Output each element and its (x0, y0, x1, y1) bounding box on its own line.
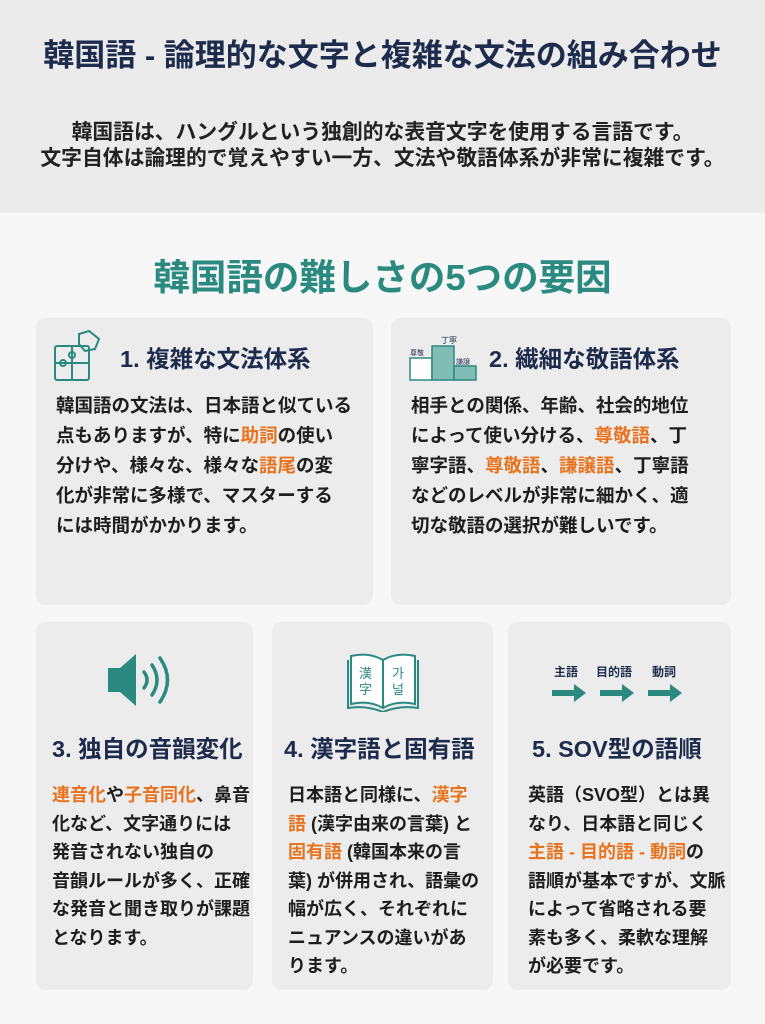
body (288, 785, 479, 976)
icon: podium: 尊敬 (410, 348, 424, 358)
body: 点もありますが、特に助詞の使い (56, 425, 333, 446)
title: 韓国語 - 論理的な文字と複雑な文法の組み合わせ (43, 38, 722, 73)
body: 音韻ルールが多く、正確 (52, 870, 250, 890)
body: 化が非常に多様で、マスターする (56, 485, 333, 506)
icon: book (347, 654, 419, 712)
body: 韓国語の文法は、日本語と似ている (56, 395, 352, 416)
body (528, 785, 726, 976)
panel: pronunciation (36, 622, 253, 990)
icon: book: 字 (359, 679, 372, 698)
icon: SOV arrows: 目的語 (596, 663, 632, 680)
body: 相手との関係、年齢、社会的地位 (411, 395, 688, 416)
body: 幅が広く、それぞれに (288, 899, 468, 919)
icon: podium: 丁寧 (441, 335, 457, 346)
body (56, 395, 352, 536)
icon: book: 가 (392, 663, 404, 682)
section heading: 韓国語の難しさの5つの要因 (153, 257, 612, 298)
icon: book: 漢 (359, 663, 372, 682)
body: には時間がかかります。 (56, 515, 258, 536)
heading: 1. 複雑な文法体系 (120, 346, 311, 372)
panel: vocabulary (272, 622, 493, 990)
body: 発音されない独自の (52, 842, 214, 862)
icon: podium: 謙譲 (456, 357, 470, 367)
subtitle: 韓国語は、ハングルという独創的な表音文字を使用する言語です。 (72, 121, 693, 144)
body: などのレベルが非常に細かく、適 (411, 485, 689, 506)
icon: SOV arrows: 動詞 (652, 663, 676, 680)
body: 固有語 (韓国本来の言 (288, 842, 461, 862)
body: な発音と聞き取りが課題 (52, 899, 250, 919)
body: 語 (漢字由来の言葉) と (288, 814, 472, 834)
body (52, 785, 250, 948)
body: 葉) が併用され、語彙の (288, 870, 479, 890)
body: 日本語と同様に、漢字 (288, 785, 467, 805)
body: によって使い分ける、尊敬語、丁 (411, 425, 687, 446)
heading: 5. SOV型の語順 (532, 736, 702, 762)
panel: honorifics (391, 318, 731, 605)
icon: puzzle (54, 330, 100, 381)
body: 英語（SVO型）とは異 (528, 785, 710, 805)
icon: speaker (108, 654, 170, 706)
body: 主語 - 目的語 - 動詞の (528, 842, 704, 862)
body: 素も多く、柔軟な理解 (528, 928, 708, 948)
heading: 4. 漢字語と固有語 (284, 736, 475, 762)
body: ります。 (288, 956, 358, 976)
panel: grammar (36, 318, 373, 605)
body: となります。 (52, 928, 158, 948)
body: 切な敬語の選択が難しいです。 (411, 515, 668, 536)
subtitle: 文字自体は論理的で覚えやすい一方、文法や敬語体系が非常に複雑です。 (40, 147, 725, 170)
body: 分けや、様々な、様々な語尾の変 (56, 455, 333, 476)
header band (0, 0, 765, 213)
body: ニュアンスの違いがあ (288, 928, 467, 948)
body: 化など、文字通りには (52, 814, 231, 834)
heading: 3. 独自の音韻変化 (52, 736, 243, 762)
body: 寧字語、尊敬語、謙譲語、丁寧語 (411, 455, 689, 476)
body: 語順が基本ですが、文脈 (528, 870, 726, 890)
heading: 2. 繊細な敬語体系 (489, 346, 680, 372)
icon: book: 널 (392, 679, 404, 698)
icon: podium (409, 335, 477, 381)
body: によって省略される要 (528, 899, 707, 919)
body (411, 395, 689, 536)
panel: word order (508, 622, 731, 990)
icon: SOV arrows: 主語 (554, 663, 578, 680)
icon: SOV arrows (552, 663, 682, 702)
body: 連音化や子音同化、鼻音 (52, 785, 250, 805)
body: が必要です。 (528, 956, 634, 976)
subtitle (40, 120, 725, 170)
body: なり、日本語と同じく (528, 814, 707, 834)
